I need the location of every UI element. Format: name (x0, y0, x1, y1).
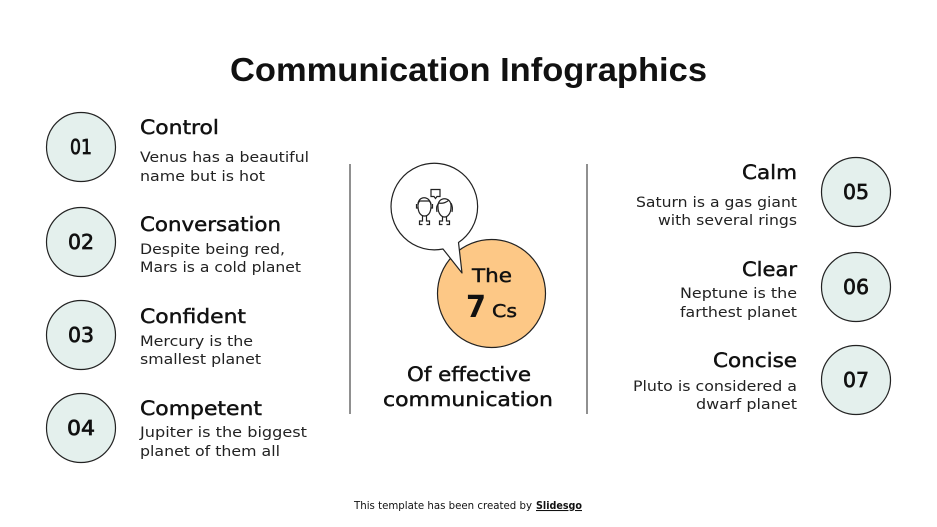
item 07: Concise: Concise (713, 349, 797, 372)
speech bubble with people icon (391, 163, 478, 273)
item 05: Calm: 05 (843, 180, 869, 204)
center caption (383, 363, 553, 411)
item 06: Clear (680, 252, 890, 322)
item 01: Control: Control (140, 116, 219, 139)
item 04: Competent (46, 394, 308, 462)
center badge: The 7 Cs: Cs (492, 301, 517, 322)
center badge: The 7 Cs (438, 240, 546, 348)
item 01: Control (46, 112, 309, 185)
item 03: Confident: 03 (68, 323, 94, 347)
item 02: Conversation: Mars is a cold planet (140, 260, 302, 276)
item 05: Calm: with several rings (658, 213, 797, 229)
item 04: Competent: Competent (140, 397, 262, 420)
item 07: Concise: 07 (843, 368, 869, 392)
item 07: Concise: dwarf planet (696, 397, 798, 413)
item 02: Conversation: Conversation (140, 213, 281, 236)
item 06: Clear: Neptune is the (680, 286, 797, 302)
item 07: Concise: Pluto is considered a (633, 379, 797, 395)
item 06: Clear: farthest planet (680, 305, 798, 321)
footer credit: This template has been created by (353, 500, 532, 512)
item 03: Confident: smallest planet (140, 352, 262, 368)
item 02: Conversation: Despite being red, (140, 242, 285, 258)
item 07: Concise (633, 346, 890, 414)
footer credit: Slidesgo (536, 500, 582, 512)
item 01: Control: name but is hot (140, 169, 266, 185)
item 03: Confident (46, 300, 262, 370)
item 05: Calm (636, 158, 890, 229)
title: Communication Infographics (230, 51, 707, 88)
item 03: Confident: Mercury is the (140, 334, 253, 350)
item 06: Clear: 06 (843, 275, 869, 299)
item 04: Competent: Jupiter is the biggest (139, 425, 308, 441)
icon: two people talking (416, 190, 452, 224)
center caption: Of effective (407, 363, 531, 386)
center badge: The 7 Cs: The (471, 265, 512, 287)
item 05: Calm: Calm (742, 161, 797, 184)
item 04: Competent: planet of them all (140, 444, 280, 460)
item 01: Control: Venus has a beautiful (140, 150, 309, 166)
item 01: Control: 01 (70, 135, 92, 159)
item 02: Conversation: 02 (68, 230, 94, 254)
item 04: Competent: 04 (67, 416, 95, 440)
item 02: Conversation (46, 208, 302, 276)
item 05: Calm: Saturn is a gas giant (636, 195, 798, 211)
item 06: Clear: Clear (742, 258, 798, 281)
item 03: Confident: Confident (140, 305, 246, 328)
center caption: communication (383, 388, 553, 411)
center badge: The 7 Cs: 7 (466, 290, 486, 325)
